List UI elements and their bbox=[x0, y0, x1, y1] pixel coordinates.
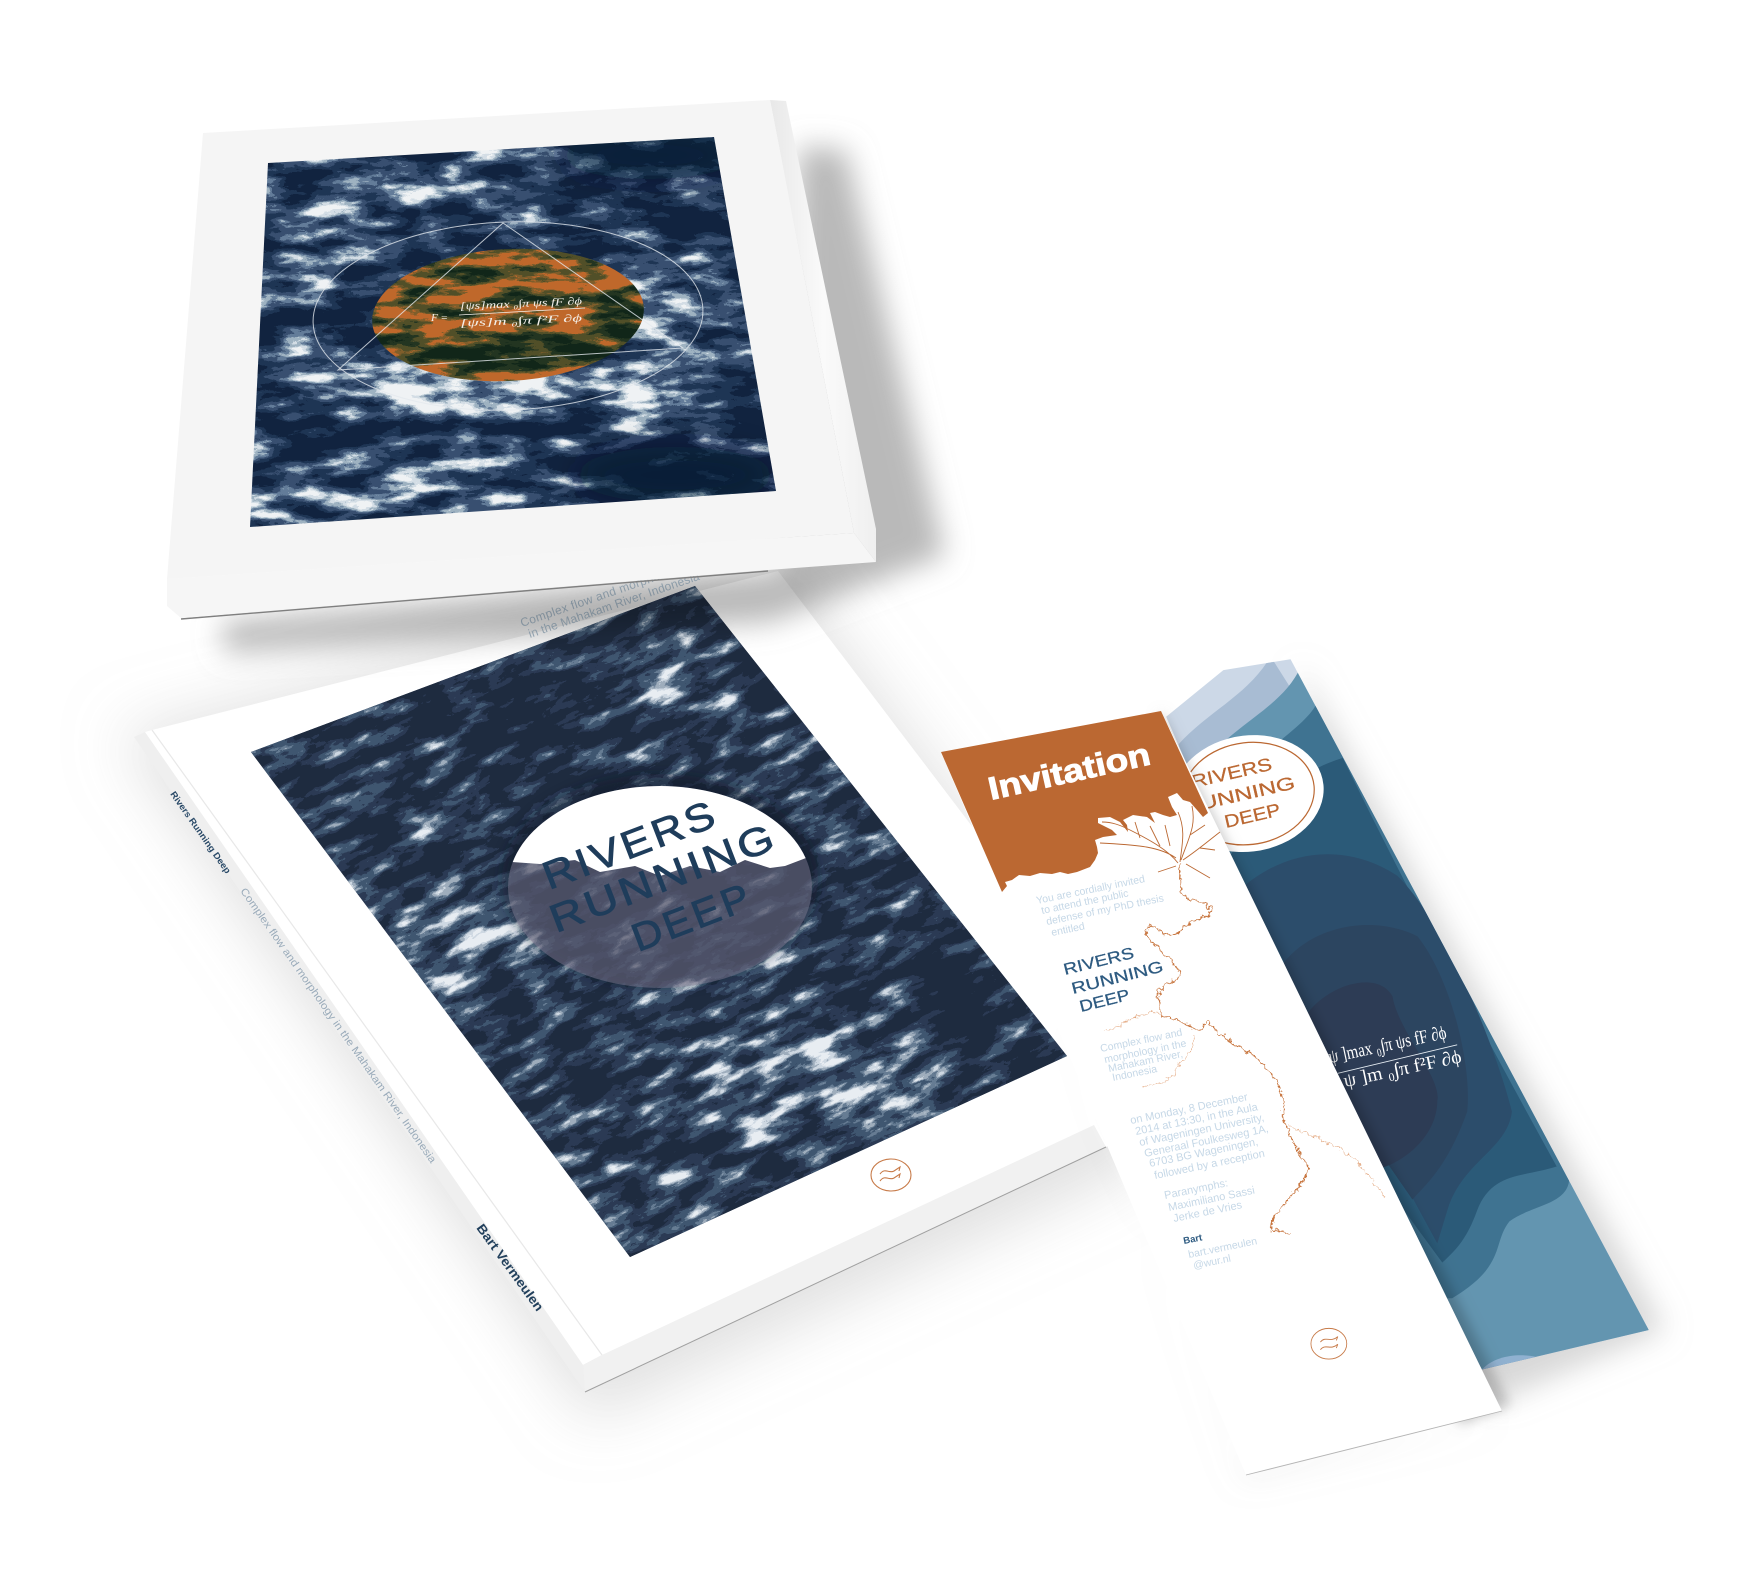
bottom thickness bbox=[167, 533, 876, 618]
formula line bbox=[1338, 1045, 1457, 1073]
cover title: DEEP bbox=[626, 875, 759, 960]
invitation details: of Wageningen University, bbox=[1138, 1112, 1265, 1149]
invitation title: RIVERS bbox=[1062, 945, 1136, 979]
invitation subtitle: Mahakam River, bbox=[1107, 1048, 1184, 1075]
river bbox=[1147, 864, 1308, 1234]
cover title: RUNNING bbox=[544, 815, 783, 941]
disc shadow bbox=[502, 774, 818, 986]
contact: @wur.nl bbox=[1192, 1253, 1232, 1272]
formula: [ψs]m ₀∫π f²F ∂ϕ bbox=[460, 313, 583, 330]
card disc title: RIVERS bbox=[1189, 754, 1274, 792]
logo disc on card bbox=[1168, 727, 1329, 860]
formula bbox=[430, 296, 585, 330]
paranymphs: Paranymphs: bbox=[1163, 1177, 1229, 1202]
invitation subtitle: Indonesia bbox=[1111, 1063, 1158, 1084]
river tributaries bbox=[1104, 1013, 1383, 1195]
invitation title: RUNNING bbox=[1070, 959, 1165, 998]
cover bbox=[167, 100, 854, 579]
card disc title bbox=[1180, 754, 1297, 832]
formula: F = bbox=[430, 312, 448, 324]
invitation details: followed by a reception bbox=[1153, 1148, 1266, 1182]
card disc title: DEEP bbox=[1222, 800, 1282, 832]
paranymphs: Jerke de Vries bbox=[1172, 1199, 1244, 1225]
invitation details bbox=[1129, 1091, 1270, 1182]
invitation title: DEEP bbox=[1078, 987, 1131, 1016]
card formula: ψ ]m ₀∫π f²F ∂ϕ bbox=[1342, 1046, 1464, 1093]
invitation details: on Monday, 8 December bbox=[1129, 1091, 1249, 1127]
shadow: bookmark bbox=[1150, 711, 1510, 1425]
disc overlay bbox=[508, 786, 812, 988]
card formula: ψ ]max ₀∫π ψs fF ∂ϕ bbox=[1327, 1022, 1449, 1069]
invitation details: Generaal Foulkesweg 1A, bbox=[1143, 1123, 1270, 1160]
invitation title bbox=[1062, 945, 1165, 1016]
invitation details: 6703 BG Wageningen, bbox=[1148, 1136, 1259, 1170]
bookmark sheet bbox=[941, 711, 1502, 1475]
thin ring bbox=[310, 215, 706, 417]
card formula bbox=[1327, 1022, 1464, 1093]
river delta bbox=[1100, 806, 1220, 878]
contact: Bart bbox=[1182, 1232, 1204, 1247]
invitation card bbox=[1166, 659, 1649, 1370]
right spine bbox=[770, 100, 876, 562]
page edge line bbox=[181, 571, 768, 619]
invitation subtitle bbox=[1099, 1027, 1188, 1084]
invitation intro: defense of my PhD thesis bbox=[1045, 892, 1165, 928]
invitation subtitle: morphology in the bbox=[1103, 1038, 1188, 1066]
card disc title: RUNNING bbox=[1180, 773, 1297, 818]
shadow: bookmark left edge bbox=[1070, 1020, 1500, 1478]
invitation intro bbox=[1035, 873, 1165, 939]
paranymphs bbox=[1163, 1177, 1256, 1225]
invitation heading: Invitation bbox=[985, 736, 1154, 807]
cover sheet bbox=[152, 571, 1180, 1355]
shadow: back book bbox=[222, 146, 945, 652]
invitation intro: entitled bbox=[1050, 920, 1086, 939]
contour layers bbox=[1178, 662, 1649, 1370]
cover subtitle: in the Mahakam River, Indonesia bbox=[526, 569, 701, 641]
water photo bbox=[240, 130, 785, 535]
invitation intro: You are cordially invited bbox=[1035, 873, 1146, 907]
orange disc bbox=[372, 248, 644, 382]
paranymphs: Maximiliano Sassi bbox=[1167, 1185, 1256, 1214]
contact: bart.vermeulen bbox=[1187, 1235, 1258, 1261]
orange header bbox=[941, 711, 1208, 892]
back book bbox=[167, 100, 876, 619]
front book bbox=[146, 571, 1107, 1392]
shadow: invitation card bbox=[1300, 665, 1665, 1400]
cover subtitle: Complex flow and morphology bbox=[518, 561, 684, 630]
book bottom page edge bbox=[583, 1125, 1106, 1392]
invitation details: 2014 at 13:30, in the Aula bbox=[1134, 1101, 1260, 1138]
shadow: front book bbox=[120, 560, 1180, 1420]
cover title bbox=[537, 792, 783, 960]
contact bbox=[1182, 1232, 1258, 1272]
spine subtitle: Complex flow and morphology in the Mahakam River, Indonesia bbox=[238, 886, 438, 1166]
white disc bbox=[512, 786, 806, 876]
spine author: Bart Vermeulen bbox=[474, 1221, 547, 1314]
logo icon bbox=[871, 1159, 911, 1191]
formula: [ψs]max ₀∫π ψs fF ∂ϕ bbox=[460, 296, 583, 313]
cover title: RIVERS bbox=[537, 792, 724, 898]
water photo bbox=[251, 586, 1067, 1257]
bookmark invitation bbox=[941, 711, 1502, 1475]
invitation intro: to attend the public bbox=[1040, 887, 1130, 917]
footer logo bbox=[1311, 1328, 1347, 1359]
invitation subtitle: Complex flow and bbox=[1099, 1027, 1184, 1055]
book spine bbox=[134, 732, 585, 1392]
thin triangle bbox=[338, 223, 683, 370]
spine title: Rivers Running Deep bbox=[168, 789, 233, 876]
